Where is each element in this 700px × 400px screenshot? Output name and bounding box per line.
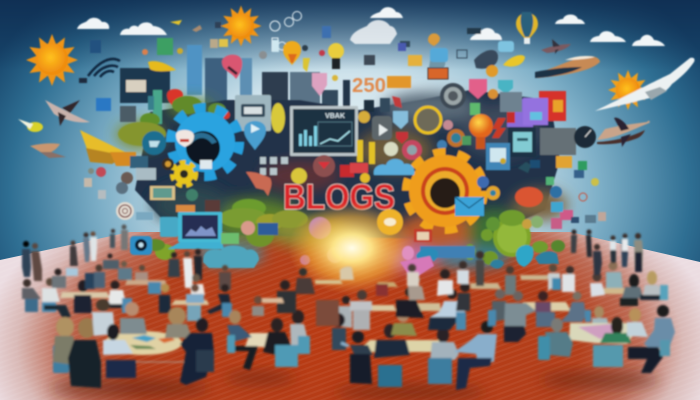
red chevrons <box>492 118 506 138</box>
table group right of front mid <box>252 266 354 350</box>
red orange ball <box>515 187 543 207</box>
large grey dial <box>440 83 466 109</box>
red frame tile <box>414 229 432 242</box>
camera icon <box>130 236 152 255</box>
plane left upper <box>45 100 90 126</box>
table group back left <box>52 264 167 294</box>
keypad grid <box>260 157 288 175</box>
blue pin <box>244 121 266 150</box>
orange number sign <box>352 75 411 97</box>
colored tiles <box>136 200 220 220</box>
orange ball <box>469 114 493 149</box>
BLOGS title: BLOGS <box>283 178 395 217</box>
blue gear <box>172 109 238 175</box>
dark dial near plane <box>574 126 596 148</box>
yellow blob and badges <box>291 155 354 184</box>
small yellow gear <box>173 163 195 185</box>
teal tower <box>148 90 162 124</box>
small tiles far right <box>551 202 606 229</box>
bushes left <box>118 96 285 146</box>
spiral <box>116 202 134 220</box>
yellow plane <box>80 130 136 166</box>
yellow ring <box>415 107 441 133</box>
large white plane <box>595 58 695 111</box>
sun right <box>608 70 648 110</box>
standing people right <box>571 230 643 275</box>
blue ornate arches right <box>416 245 559 269</box>
small icons top left <box>79 20 228 122</box>
table group front mid <box>226 310 310 370</box>
collage colour washes <box>116 92 568 270</box>
pink location pin <box>167 89 183 108</box>
yellow fish plane <box>148 61 176 71</box>
pink and teal badges <box>469 79 513 115</box>
orange number sign: 250 <box>352 75 386 97</box>
bright icons right of gear <box>477 156 599 201</box>
bushes bottom right <box>464 210 565 265</box>
white grey screen panel <box>235 95 271 131</box>
plane left lower <box>30 143 66 158</box>
sun left <box>26 34 78 86</box>
teal speech icons <box>142 130 194 155</box>
table group right back <box>590 262 668 306</box>
table group front far right <box>538 305 675 373</box>
blue small monitor <box>486 143 510 170</box>
standing people left <box>22 224 128 281</box>
monitor label: VBAK <box>325 113 345 120</box>
sun top <box>220 6 262 46</box>
table group far left <box>22 278 132 319</box>
pink decorations <box>400 210 573 280</box>
pink balloon icon <box>222 55 242 79</box>
wifi arcs <box>88 59 120 77</box>
icons cluster lower left <box>84 156 212 201</box>
floor shadows under tables <box>50 372 660 400</box>
teal monitor <box>508 127 536 157</box>
table group center far right <box>488 289 610 342</box>
rocket plane <box>535 56 600 78</box>
red cards left of gear <box>350 163 370 183</box>
central glow <box>288 202 416 294</box>
blue envelope <box>455 197 484 216</box>
screen tile and green tile <box>160 217 239 244</box>
balloon top right <box>516 12 538 44</box>
table group center right back <box>350 275 466 336</box>
city skyline <box>120 45 350 112</box>
bee <box>18 119 43 132</box>
lightbulb <box>328 43 344 69</box>
pig <box>246 172 271 196</box>
bushes bottom centre-left <box>145 199 308 260</box>
collage backdrop <box>135 90 560 240</box>
table group back center <box>376 251 575 311</box>
left mid icons <box>357 96 471 164</box>
table group front left <box>53 299 214 388</box>
laptop <box>168 212 224 249</box>
hot air balloon orange <box>283 41 301 65</box>
table group middle left <box>159 274 232 321</box>
icon cluster top centre-right <box>364 28 525 79</box>
table group front right <box>341 321 497 390</box>
blue cloud icon <box>374 159 415 175</box>
yellow speech badge <box>377 209 403 235</box>
crowd near laptop <box>103 249 231 290</box>
main monitor with chart <box>290 106 358 156</box>
floor <box>0 232 700 400</box>
small floating icons top centre <box>259 26 338 96</box>
red and purple panels <box>500 91 566 127</box>
red dot <box>222 111 230 119</box>
dark plane right <box>597 118 650 147</box>
grey panel <box>540 128 576 155</box>
ring doodles <box>270 12 302 51</box>
small plane top right <box>541 39 571 54</box>
clouds <box>77 7 665 46</box>
blue ornate arches left <box>203 246 259 268</box>
orange gear <box>407 153 483 229</box>
purple floral <box>300 217 343 265</box>
